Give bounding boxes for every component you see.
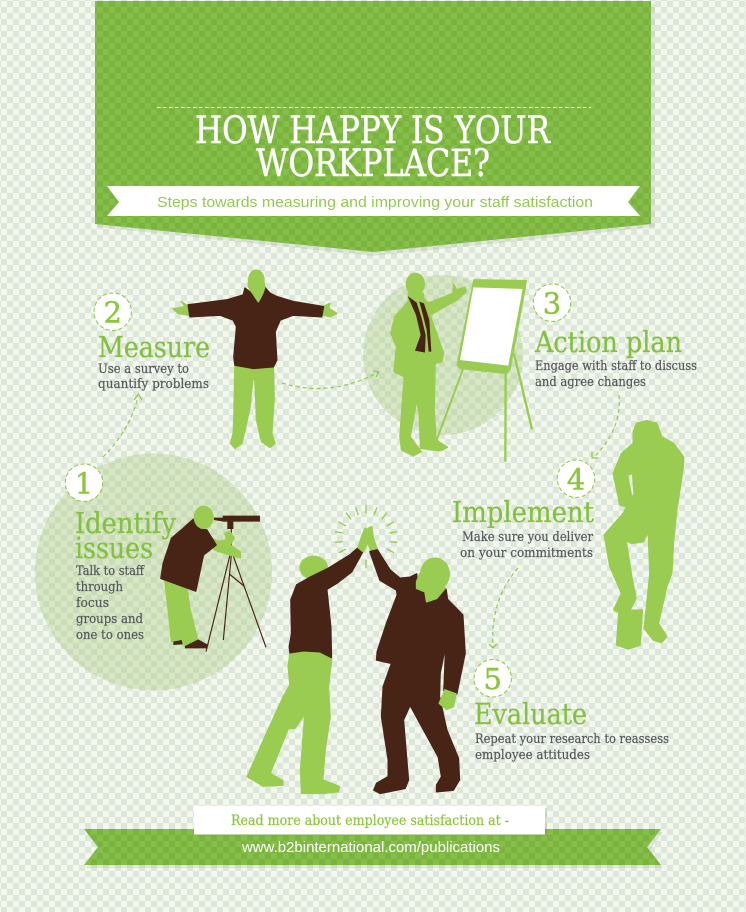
text: identify description — [76, 564, 146, 643]
heading: identify issues: issues — [75, 532, 153, 565]
heading: measure: Measure — [98, 331, 210, 364]
text: identify description: Talk to staff — [76, 564, 146, 579]
header banner — [95, 1, 655, 256]
subtitle ribbon — [107, 186, 640, 216]
text: identify description: focus — [76, 596, 109, 611]
text: implement description: Make sure you deliver — [462, 530, 594, 545]
title — [195, 109, 551, 185]
footer ribbon — [84, 829, 663, 868]
text: evaluate description: employee attitudes — [475, 748, 590, 763]
step 4: implement — [452, 460, 595, 561]
text: measure description — [98, 362, 209, 392]
number badge 4: 4 — [567, 462, 585, 496]
text: implement description — [460, 530, 594, 561]
heading: implement: Implement — [452, 496, 594, 529]
text: action plan description: Engage with staff to discuss — [535, 359, 697, 374]
figure: evaluate, two men high-fiving — [247, 505, 465, 793]
text: measure description: Use a survey to — [98, 362, 189, 377]
text: action plan description: and agree changes — [535, 375, 646, 390]
arrow: step 4 to step 5 — [489, 568, 518, 648]
subtitle ribbon: Steps towards measuring and improving your staff satisfaction — [157, 194, 593, 211]
text: implement description: on your commitments — [460, 546, 593, 561]
figure: measure, man with arms wide — [173, 269, 337, 448]
number badge 5: 5 — [483, 662, 502, 696]
circle: step 1 backdrop — [35, 454, 272, 690]
arrow: step 2 to step 3 — [282, 371, 379, 388]
text: evaluate description: Repeat your research to reassess — [475, 732, 669, 747]
text: evaluate description — [475, 732, 669, 763]
figure: identify issues, man with telescope — [161, 506, 266, 652]
text: identify description: through — [76, 580, 124, 595]
icon: clap rays — [335, 505, 397, 568]
number badge 5 — [474, 660, 511, 697]
number badge 2: 2 — [103, 296, 122, 330]
number badge 3: 3 — [543, 286, 561, 320]
footer url: www.b2binternational.com/publications — [241, 840, 500, 856]
title: WORKPLACE? — [256, 142, 490, 185]
text: measure description: quantify problems — [98, 377, 209, 392]
figure: action plan, man at flipchart — [391, 273, 532, 462]
number badge 1: 1 — [75, 466, 93, 500]
text: identify description: groups and — [76, 612, 143, 627]
text: action plan description — [535, 359, 697, 390]
title: HOW HAPPY IS YOUR — [195, 109, 551, 152]
arrow: step 1 to step 2 — [103, 394, 142, 457]
number badge 1 — [65, 464, 103, 501]
number badge 3 — [533, 284, 571, 321]
text: identify description: one to ones — [76, 628, 144, 643]
step 5: evaluate — [474, 660, 669, 763]
footer call-to-action box — [194, 806, 547, 836]
heading: identify issues: Identify — [75, 507, 177, 540]
heading: identify issues — [75, 507, 177, 565]
step 2: measure — [94, 293, 210, 392]
heading: action plan: Action plan — [534, 326, 682, 359]
step 1: identify issues — [65, 464, 177, 643]
footer call-to-action box: Read more about employee satisfaction at - — [231, 813, 509, 829]
circle: step 3 backdrop — [363, 275, 523, 435]
step 3: action plan — [533, 284, 697, 390]
arrow: step 3 to step 4 — [592, 395, 619, 458]
heading: evaluate: Evaluate — [474, 698, 587, 731]
figure: implement, man with spade — [604, 421, 683, 649]
number badge 4 — [557, 460, 595, 497]
